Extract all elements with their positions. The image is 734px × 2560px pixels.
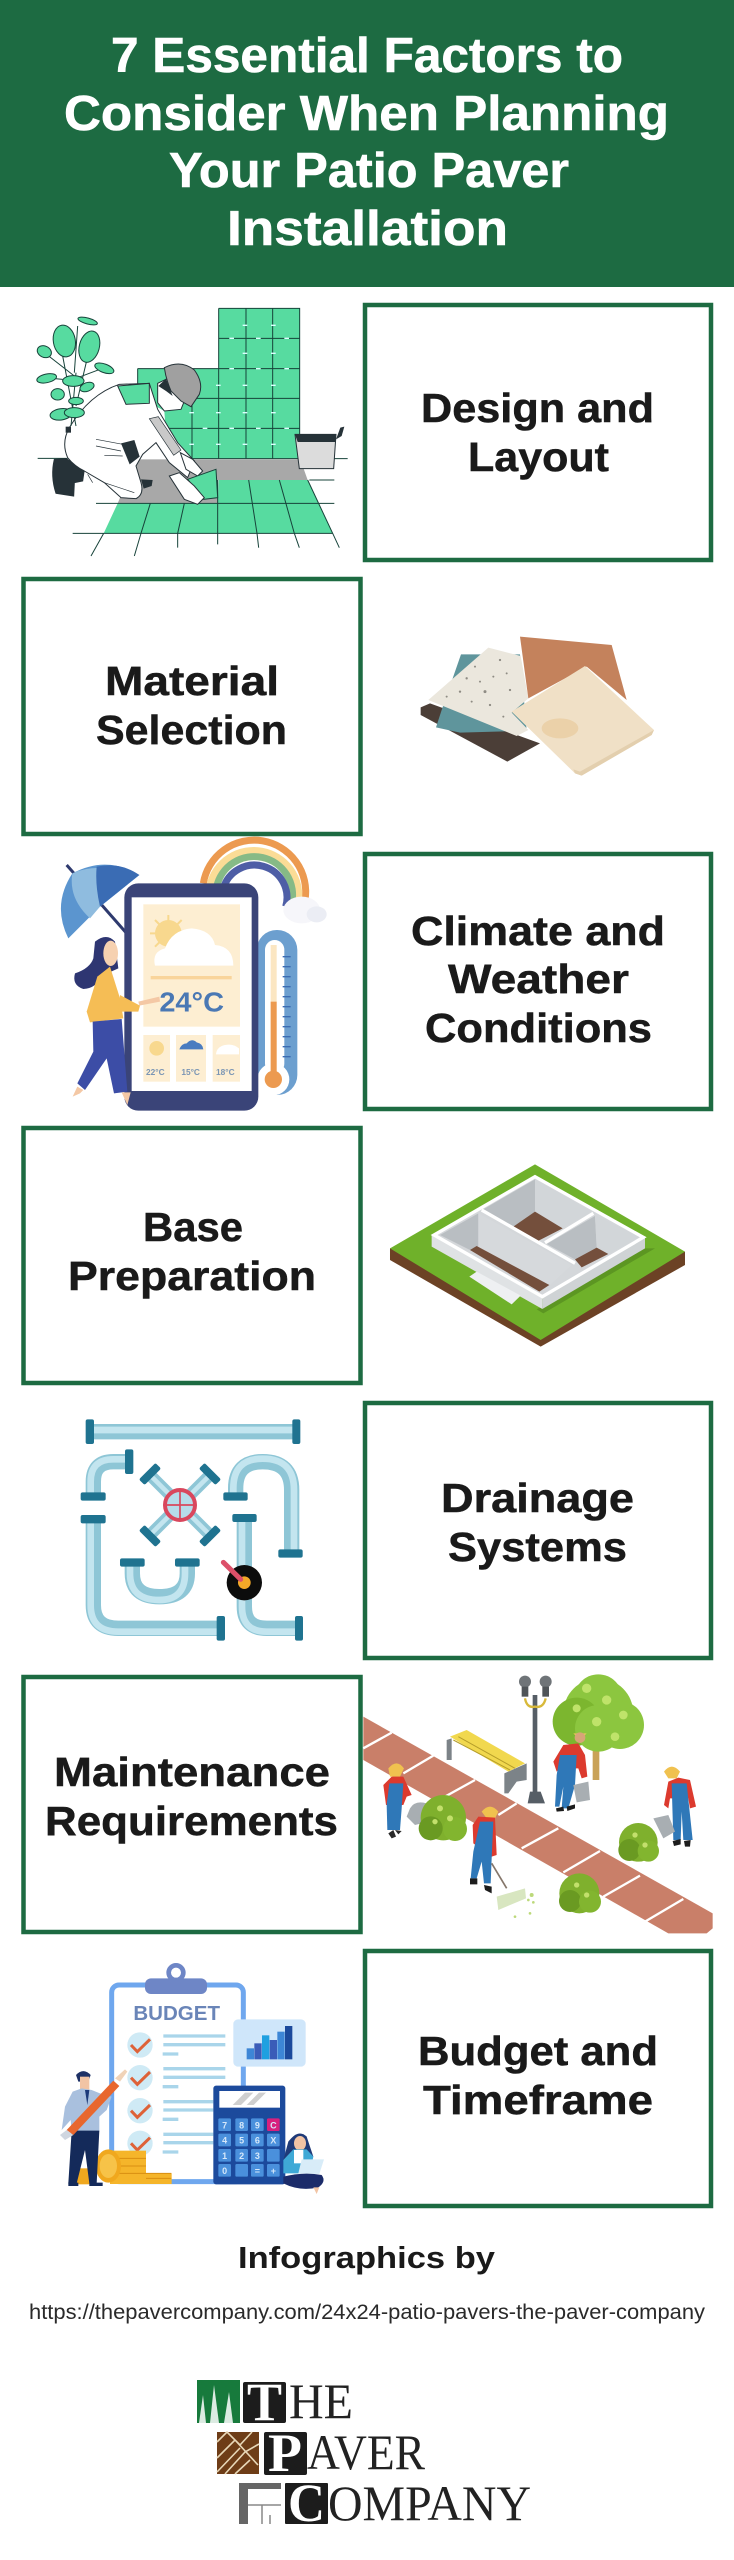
calculator: 4 xyxy=(222,2136,227,2146)
label: Budget and xyxy=(418,2028,658,2074)
company logo: OMPANY xyxy=(328,2475,531,2531)
illustration: weather app on phone xyxy=(61,840,327,1111)
illustration: paver material samples xyxy=(421,637,654,776)
calculator: 8 xyxy=(239,2120,244,2130)
company logo: HE xyxy=(289,2373,353,2429)
company logo: C xyxy=(288,2473,325,2533)
panel: Material Selection xyxy=(24,579,360,834)
panel: Drainage Systems xyxy=(365,1403,711,1658)
icon: umbrella xyxy=(61,865,139,938)
icon: phone: 18°C xyxy=(216,1067,235,1077)
company logo: T xyxy=(247,2372,282,2432)
company logo: AVER xyxy=(307,2424,426,2480)
panel: Budget and Timeframe xyxy=(365,1951,711,2206)
icon: thermometer xyxy=(257,930,297,1095)
icon: phone: 15°C xyxy=(181,1067,200,1077)
bench xyxy=(447,1730,527,1793)
calculator: 0 xyxy=(222,2166,227,2176)
clipboard: BUDGET xyxy=(133,2003,220,2025)
panel: Base Preparation xyxy=(24,1128,360,1383)
label: Weather xyxy=(448,956,629,1002)
header banner xyxy=(0,0,734,287)
icon: potted plant leaves xyxy=(35,316,115,426)
label xyxy=(411,908,665,1051)
icon: rainbow xyxy=(203,840,306,907)
illustration: garden maintenance crew xyxy=(363,1674,713,1933)
worker with watering can, right xyxy=(653,1767,696,1847)
street lamp xyxy=(519,1676,552,1803)
label: Timeframe xyxy=(423,2077,653,2123)
icon: brick paver square xyxy=(217,2432,259,2474)
illustration: worker laying tiles xyxy=(35,308,348,556)
panel: Climate and Weather Conditions xyxy=(365,854,711,1109)
shrubs xyxy=(419,1795,659,1913)
calculator: X xyxy=(270,2136,276,2146)
icon: grass square xyxy=(197,2380,240,2423)
man with pencil xyxy=(60,2069,127,2186)
bar chart card xyxy=(233,2019,306,2067)
credit heading: Infographics by xyxy=(238,2240,496,2275)
title: 7 Essential Factors to xyxy=(111,29,623,83)
label: Base xyxy=(143,1204,243,1250)
label xyxy=(418,2028,658,2123)
calculator: 6 xyxy=(255,2136,260,2146)
calculator: 3 xyxy=(255,2151,260,2161)
panel: Maintenance Requirements xyxy=(24,1677,360,1932)
tree xyxy=(553,1674,644,1780)
label: Material xyxy=(105,658,279,704)
title: Installation xyxy=(227,202,508,256)
label xyxy=(96,658,287,753)
icon: red valve wheel xyxy=(165,1490,195,1520)
clipboard xyxy=(112,1965,243,2182)
icon: black shutoff valve xyxy=(223,1562,262,1600)
calculator xyxy=(213,2086,285,2184)
worker sweeping xyxy=(470,1807,535,1918)
label: Climate and xyxy=(411,908,665,954)
gold coins xyxy=(76,2149,172,2184)
label xyxy=(68,1204,316,1299)
label xyxy=(421,385,654,480)
worker with watering can, left xyxy=(383,1763,428,1838)
label: Design and xyxy=(421,385,654,431)
label: Preparation xyxy=(68,1253,316,1299)
calculator: C xyxy=(270,2120,277,2130)
label: Requirements xyxy=(45,1798,338,1844)
label: Layout xyxy=(468,434,609,480)
calculator: 9 xyxy=(255,2120,260,2130)
woman with laptop xyxy=(283,2133,324,2194)
label: Maintenance xyxy=(54,1749,330,1795)
label: Drainage xyxy=(441,1475,634,1521)
source url: https://thepavercompany.com/24x24-patio-pavers-the-paver-company xyxy=(29,2301,706,2324)
company logo xyxy=(197,2372,531,2533)
icon: woman pointing xyxy=(73,937,160,1105)
calculator: = xyxy=(255,2166,260,2176)
calculator: + xyxy=(271,2166,276,2176)
illustration: foundation floor plan xyxy=(390,1164,685,1347)
title xyxy=(64,29,669,256)
title: Your Patio Paver xyxy=(169,144,569,198)
icon: gray tile square xyxy=(239,2483,281,2524)
calculator: 2 xyxy=(239,2151,244,2161)
label xyxy=(45,1749,338,1844)
label: Systems xyxy=(448,1524,627,1570)
label xyxy=(441,1475,634,1570)
panel: Design and Layout xyxy=(365,305,711,560)
icon: phone: 24°C xyxy=(159,987,224,1018)
company logo: P xyxy=(268,2423,302,2483)
brick walkway xyxy=(363,1717,713,1933)
icon: phone: 22°C xyxy=(146,1067,165,1077)
illustration: budget clipboard and calculator xyxy=(60,1965,324,2194)
label: Conditions xyxy=(425,1005,652,1051)
title: Consider When Planning xyxy=(64,87,669,141)
calculator: 5 xyxy=(239,2136,244,2146)
label: Selection xyxy=(96,707,287,753)
illustration: drainage pipes xyxy=(81,1419,303,1641)
calculator: 7 xyxy=(222,2120,227,2130)
icon: phone xyxy=(124,883,258,1111)
worker with watering can, centre xyxy=(553,1732,590,1812)
calculator: 1 xyxy=(222,2151,227,2161)
